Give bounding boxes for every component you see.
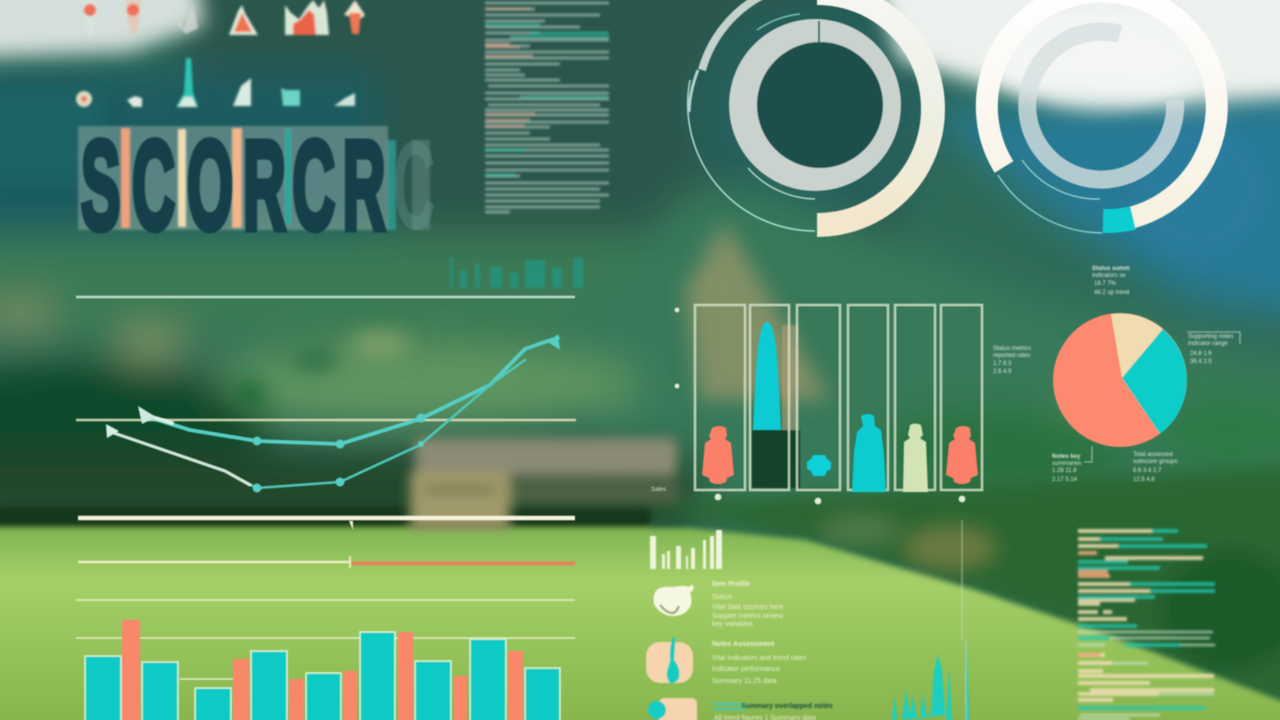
hole shading [757, 42, 883, 168]
label mid-left: 1.7 8.3 [993, 361, 1012, 367]
title: R [343, 115, 385, 256]
inner grey ring [729, 19, 901, 191]
icon: coral house 6 [344, 0, 365, 34]
outer left thin arc [688, 80, 815, 231]
glow at top of ring [996, 10, 1206, 110]
outer cream arc [817, 0, 933, 225]
icon: teal square [281, 88, 300, 106]
label top: Status summ [1092, 266, 1130, 272]
lower trend line [106, 360, 525, 492]
label right: 24.8 1.6 [1190, 351, 1212, 357]
shaded fills in columns [752, 325, 800, 488]
pie chart [1053, 313, 1187, 447]
label mid-left: 2.6 4.9 [993, 369, 1012, 375]
icon: coral marker 2 [126, 0, 141, 34]
label left: summaries [1052, 461, 1081, 467]
icon: pale wedge [233, 78, 251, 106]
thin outer arc [998, 175, 1102, 233]
outer left segment [702, 0, 765, 70]
ring gauge: right [987, 0, 1217, 233]
icon: check badge [654, 585, 694, 616]
upper trend line [138, 334, 560, 448]
icon: coral peak 4 [229, 5, 258, 35]
label left [1052, 446, 1092, 483]
label right: 36.4 2.5 [1190, 359, 1212, 365]
inner thin arc [1022, 160, 1100, 199]
icon row: teal pictograms [76, 58, 355, 107]
colored text block: bottom right [1078, 531, 1215, 719]
label mid-left [993, 346, 1031, 375]
label right [1187, 332, 1240, 365]
label mid-left: Status metrics [993, 346, 1031, 352]
text: item one: Vital data sources here [712, 604, 784, 611]
text: item two: Notes Assessment [712, 641, 775, 648]
figure: teal robed person [852, 414, 886, 492]
title: C [132, 115, 175, 256]
list item: drop [646, 636, 807, 685]
label bottom: Total assessed [1133, 452, 1173, 458]
silhouette panel chart [651, 305, 982, 504]
title [81, 115, 436, 256]
label right: Supporting notes [1188, 334, 1233, 340]
inner grey ring [1027, 32, 1175, 180]
label left: Notes key [1052, 454, 1081, 460]
title: R [243, 115, 286, 256]
axis caption: Sales [651, 487, 666, 493]
label right: indicator range [1188, 341, 1228, 347]
text: item one: Status [712, 594, 732, 601]
title: C [393, 115, 436, 256]
icon: round marker [76, 91, 92, 107]
horizontal rule lines [76, 297, 576, 679]
label top: indicators se [1092, 273, 1126, 279]
faint teal data marks [450, 258, 583, 288]
figure: teal tall dome [753, 322, 781, 430]
title background stripes [78, 126, 430, 230]
bar chart: teal and coral columns [85, 620, 560, 720]
title panel with stripes [78, 115, 436, 256]
text: item one [712, 581, 784, 628]
figure: coral person right [946, 426, 978, 484]
ring gauge: left [688, 0, 933, 231]
column markers [675, 308, 965, 504]
text: item two: Indicator performance [712, 666, 780, 673]
inner thin arc [748, 168, 815, 199]
figure: teal blob [807, 455, 831, 476]
column frames [695, 305, 982, 490]
figure: coral person left [702, 426, 734, 484]
line chart: two trend lines [106, 334, 560, 492]
label top: 18.7 7% [1094, 281, 1117, 287]
teal segment [1103, 218, 1133, 221]
icon: coral marker 1 [83, 0, 98, 36]
label top: 48.2 up trend [1094, 290, 1129, 296]
label bottom: subscore groups [1133, 459, 1177, 465]
label left: 1.28 11.8 [1052, 468, 1077, 474]
text column: top centre [485, 3, 609, 212]
icon: pale marker 3 [172, 4, 198, 34]
figure: pale person [903, 424, 928, 492]
label bottom: 12.5 4.6 [1133, 477, 1155, 483]
text: item two [712, 641, 807, 685]
label bottom [1133, 452, 1177, 483]
title: O [187, 115, 233, 256]
pie labels [993, 266, 1240, 483]
title: S [81, 115, 120, 256]
icon: pale hill [334, 93, 355, 106]
list item: bottom [648, 698, 833, 720]
icon: small heart [127, 96, 142, 107]
text: item three [713, 703, 833, 720]
title: C [292, 115, 335, 256]
label left: 2.17 5.14 [1052, 477, 1078, 483]
label bottom: 8.6 3.4 2.7 [1133, 468, 1162, 474]
icon: cream badge with teal dot [648, 698, 697, 720]
mini column chart [650, 530, 722, 569]
list item: check [654, 581, 784, 628]
icon: teal spike [176, 58, 198, 107]
outer white arc [987, 0, 1217, 218]
text: item one: Support metrics review [712, 613, 784, 620]
label mid-left: reported rates [993, 353, 1030, 359]
label top [1092, 266, 1130, 296]
text: item one: key variables [712, 621, 753, 628]
icon row: coral pictograms [83, 0, 365, 36]
text: item one: Item Profile [712, 581, 750, 588]
text: item two: Summary 11.25 data [712, 678, 777, 685]
text: item three: Summary overlapped notes [741, 703, 833, 710]
icon: cream badge with teal drop [646, 636, 693, 683]
text: item two: Vital indicators and trend rates [712, 655, 807, 662]
spike chart: bottom centre [892, 520, 969, 720]
icon: coral bars 5 [285, 0, 329, 35]
